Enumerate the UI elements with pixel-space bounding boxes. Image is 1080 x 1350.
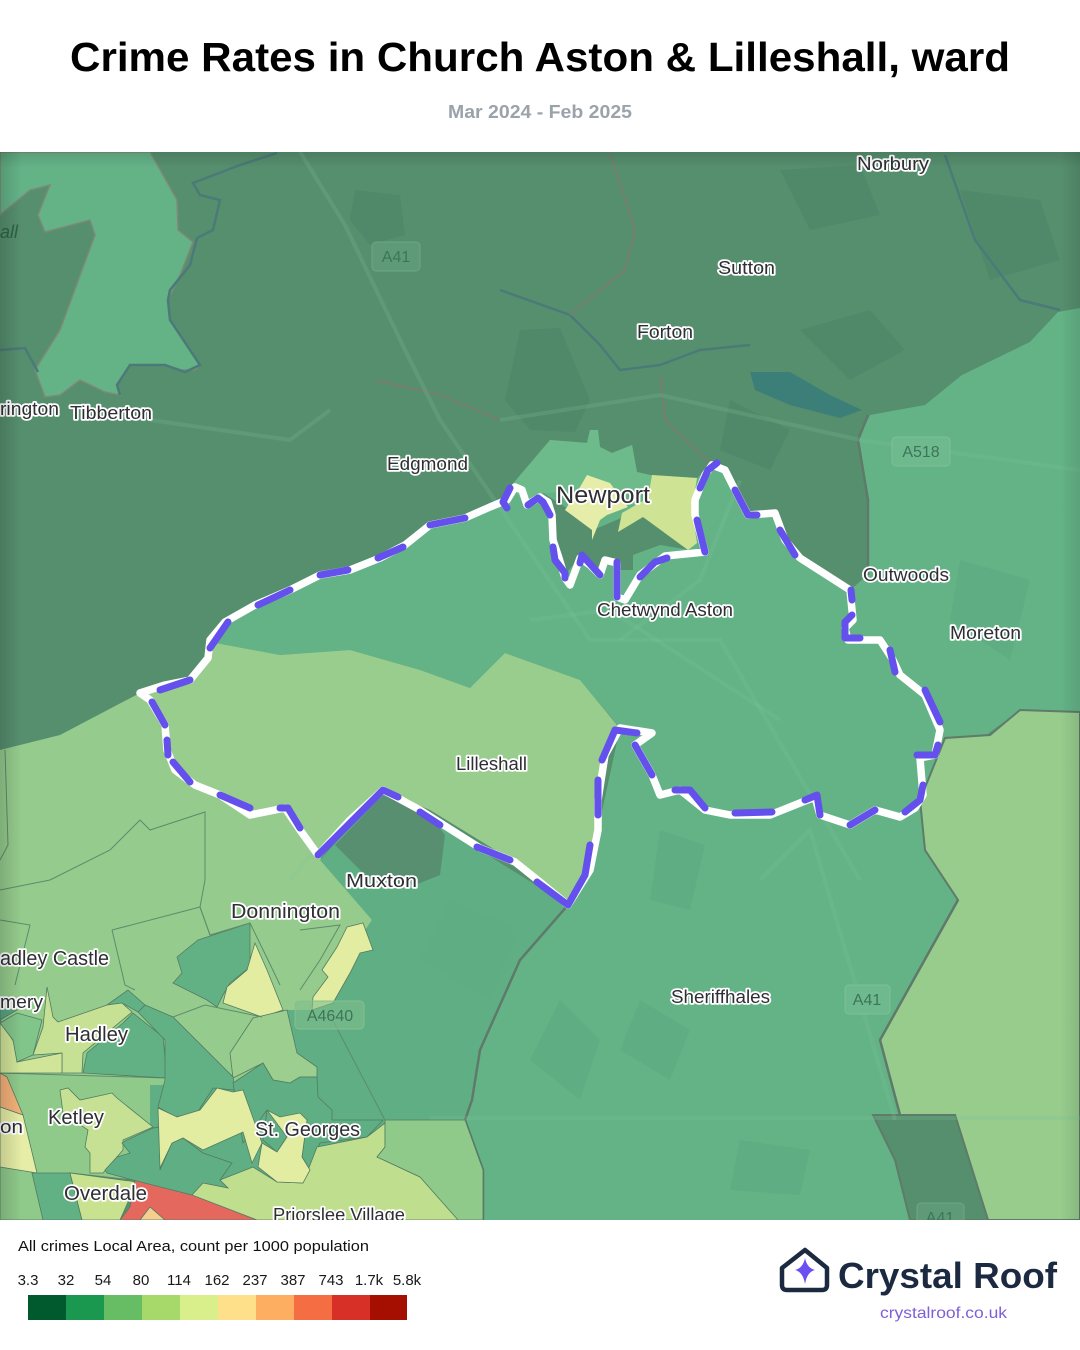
river and boundary lines bbox=[0, 153, 1060, 395]
legend values: 1.7k bbox=[355, 1272, 384, 1289]
logo: Crystal Roof bbox=[782, 1250, 1058, 1322]
place labels: Donnington bbox=[231, 901, 340, 923]
place labels bbox=[0, 154, 1021, 1225]
place labels: Chetwynd Aston bbox=[597, 600, 733, 620]
road shield: A41 east bbox=[845, 985, 890, 1014]
region: Newport north mid green bbox=[512, 430, 652, 499]
road shield: A518: A518 bbox=[902, 444, 940, 461]
place labels: Forton bbox=[637, 322, 693, 342]
legend colour scale bbox=[28, 1295, 407, 1320]
ward boundary: purple dashes bbox=[152, 463, 940, 905]
place labels: Tibberton bbox=[70, 403, 152, 423]
place labels: Edgmond bbox=[387, 454, 468, 474]
place labels: Norbury bbox=[857, 154, 929, 174]
road shield: A4640 bbox=[295, 1001, 364, 1029]
place labels: Priorslee Village bbox=[273, 1205, 405, 1225]
region: south-west mid green bbox=[287, 790, 568, 1120]
place labels: mery bbox=[0, 992, 43, 1012]
legend values: 80 bbox=[133, 1272, 149, 1289]
road shield: A518 bbox=[892, 437, 950, 466]
place labels: Sutton bbox=[718, 258, 775, 278]
forest patches on low-crime areas bbox=[350, 165, 1060, 470]
legend values: 743 bbox=[318, 1272, 344, 1289]
legend values: 237 bbox=[242, 1272, 268, 1289]
place labels: Muxton bbox=[346, 871, 417, 891]
legend values: 162 bbox=[204, 1272, 230, 1289]
legend values bbox=[18, 1272, 422, 1289]
region: north-west mid green bbox=[0, 152, 200, 397]
ward area: Lilleshall light green bbox=[140, 642, 617, 905]
region: east mid green bbox=[850, 308, 1080, 740]
region: mosaic underlay bbox=[150, 1085, 384, 1179]
place labels: Outwoods bbox=[863, 565, 949, 585]
subtle field patches in mid green bbox=[420, 560, 1030, 1195]
legend title: All crimes Local Area, count per 1000 population bbox=[18, 1238, 369, 1255]
legend bbox=[18, 1238, 422, 1320]
ward boundary: white base bbox=[140, 465, 940, 905]
place labels: Ketley bbox=[48, 1107, 104, 1129]
road shield: A41 north: A41 bbox=[382, 249, 410, 266]
legend values: 387 bbox=[280, 1272, 306, 1289]
map panel bbox=[0, 152, 1080, 1232]
region: south-east dark area bbox=[873, 1115, 988, 1220]
road shield: A4640: A4640 bbox=[307, 1008, 353, 1025]
area: Newport neighbourhoods bbox=[543, 475, 697, 577]
region: east light green bbox=[880, 710, 1080, 1220]
place labels: Newport bbox=[556, 482, 650, 509]
mosaic: thin area boundaries bbox=[0, 750, 385, 1120]
legend values: 54 bbox=[95, 1272, 111, 1289]
icon: house with star bbox=[782, 1250, 827, 1290]
road shield: A41 south: A41 bbox=[926, 1210, 954, 1227]
region: west light green lower block bbox=[0, 1073, 167, 1220]
region: west light green bbox=[0, 693, 372, 1120]
place labels: all bbox=[0, 222, 19, 242]
road shield: A41 north bbox=[372, 242, 420, 271]
place labels: Hadley bbox=[65, 1024, 128, 1046]
road shield: A41 south bbox=[916, 1202, 964, 1220]
place labels: adley Castle bbox=[0, 948, 109, 970]
road shield: A41 east: A41 bbox=[853, 992, 881, 1009]
title: Crime Rates in Church Aston & Lilleshall, ward bbox=[70, 34, 1010, 80]
region: ward north mid green bbox=[210, 430, 985, 1220]
place labels: on bbox=[0, 1117, 23, 1137]
legend values: 3.3 bbox=[18, 1272, 38, 1289]
legend values: 32 bbox=[58, 1272, 74, 1289]
lake bbox=[750, 372, 862, 418]
place labels: St. Georges bbox=[255, 1119, 360, 1141]
place labels: rington bbox=[0, 399, 59, 419]
place labels: Sheriffhales bbox=[671, 987, 770, 1007]
roads bbox=[150, 152, 1080, 1120]
area: Muxton dark bbox=[335, 795, 445, 885]
legend values: 114 bbox=[167, 1272, 191, 1289]
place labels: Overdale bbox=[64, 1183, 147, 1205]
map edge vignette bbox=[0, 152, 1080, 1220]
subtitle: date range: Mar 2024 - Feb 2025 bbox=[448, 102, 632, 122]
logo url: crystalroof.co.uk bbox=[880, 1305, 1008, 1322]
reservoir in mosaic bbox=[168, 1033, 182, 1058]
logo wordmark: Crystal Roof bbox=[838, 1255, 1058, 1296]
legend values: 5.8k bbox=[393, 1272, 422, 1289]
place labels: Moreton bbox=[950, 623, 1021, 643]
place labels: Lilleshall bbox=[456, 754, 527, 774]
mosaic: crime rate areas south-west bbox=[0, 923, 483, 1220]
